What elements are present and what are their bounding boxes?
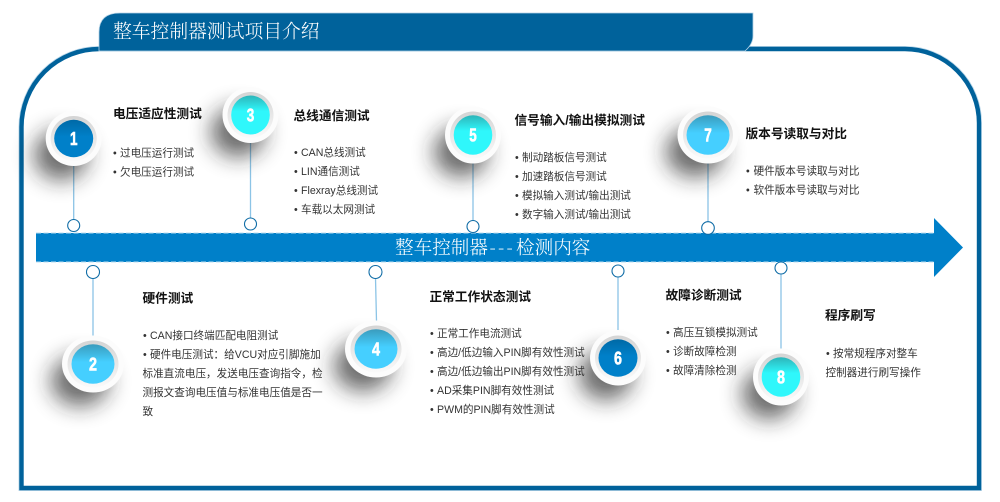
- list 3: •: [294, 147, 298, 159]
- list 6: •: [666, 365, 670, 377]
- list 3: 车载以太网测试: [301, 203, 376, 216]
- panel 8: flashing: [825, 308, 921, 379]
- title tab: [99, 13, 753, 51]
- connector lines: [74, 143, 781, 349]
- list 3: •: [294, 166, 298, 178]
- arrow label: -: [498, 234, 504, 260]
- list 1: •: [113, 166, 117, 178]
- list 3: •: [294, 204, 298, 216]
- list 4: 正常工作电流测试: [437, 327, 522, 340]
- list 5: •: [515, 152, 519, 164]
- panel 1: voltage adaptability: [113, 106, 202, 178]
- list 7: •: [746, 166, 750, 178]
- list 6: •: [666, 327, 670, 339]
- list 6: 故障清除检测: [673, 364, 737, 377]
- list 5: •: [515, 190, 519, 202]
- list 2: 标准直流电压，发送电压查询指令，检: [142, 367, 323, 380]
- panel 2: hardware: [142, 290, 323, 418]
- panel 4: normal working state: [430, 289, 585, 416]
- list 5: •: [515, 171, 519, 183]
- badge 8: [742, 348, 809, 419]
- list 4: 高边/低边输出PIN脚有效性测试: [437, 365, 585, 378]
- list 8: 按常规程序对整车: [833, 347, 918, 360]
- list 5: 模拟输入测试/输出测试: [522, 189, 631, 202]
- arrow label: -: [490, 234, 496, 260]
- badge 7: [666, 106, 738, 177]
- list 7: •: [746, 184, 750, 196]
- list 2: •: [143, 330, 147, 342]
- list 4: •: [430, 328, 434, 340]
- badge 2: [51, 336, 124, 406]
- badge 5: [434, 106, 501, 177]
- badge 3: 3: [247, 104, 254, 126]
- badge 7: 7: [704, 124, 712, 146]
- arrow label: 检测内容: [516, 234, 590, 260]
- badge 6: 6: [614, 348, 622, 368]
- list 2: CAN接口终端匹配电阻测试: [150, 329, 279, 342]
- list 3: Flexray总线测试: [301, 184, 379, 197]
- list 4: •: [430, 347, 434, 359]
- badge 6: [579, 330, 646, 400]
- list 8: 控制器进行刷写操作: [826, 366, 921, 379]
- list 5: 加速踏板信号测试: [522, 170, 607, 183]
- list 2: 硬件电压测试：给VCU对应引脚施加: [150, 348, 321, 361]
- list 1: 欠电压运行测试: [120, 166, 195, 178]
- list 1: •: [113, 148, 117, 160]
- list 4: 高边/低边输入PIN脚有效性测试: [437, 346, 585, 359]
- list 3: •: [294, 185, 298, 197]
- list 6: 诊断故障检测: [673, 345, 737, 358]
- timeline arrow: [36, 218, 963, 277]
- heading 7: 版本号读取与对比: [746, 126, 847, 141]
- list 5: •: [515, 209, 519, 221]
- heading 5: 信号输入/输出模拟测试: [514, 112, 645, 128]
- panel 6: fault diagnosis: [666, 288, 758, 377]
- arrow label: 整车控制器: [395, 234, 488, 260]
- badge 8: 8: [777, 366, 785, 388]
- list 5: 制动踏板信号测试: [522, 151, 607, 164]
- list 7: 硬件版本号读取与对比: [754, 164, 859, 178]
- heading 4: 正常工作状态测试: [430, 289, 531, 304]
- list 2: 致: [142, 405, 154, 418]
- badge 4: 4: [372, 338, 381, 360]
- badge 4: [334, 320, 407, 391]
- list 1: 过电压运行测试: [120, 146, 195, 160]
- list 8: •: [826, 348, 830, 360]
- badge 3: [211, 87, 278, 157]
- list 7: 软件版本号读取与对比: [754, 184, 859, 196]
- list 6: 高压互锁模拟测试: [673, 326, 758, 339]
- node dots: [68, 218, 787, 278]
- heading 2: 硬件测试: [142, 290, 194, 306]
- heading 3: 总线通信测试: [294, 108, 370, 123]
- list 4: AD采集PIN脚有效性测试: [437, 384, 555, 397]
- badge 5: 5: [469, 124, 477, 146]
- badge 1: [34, 111, 102, 180]
- heading 6: 故障诊断测试: [666, 288, 742, 302]
- panel 5: signal io: [514, 112, 645, 221]
- list 3: CAN总线测试: [301, 146, 366, 159]
- list 2: •: [143, 349, 147, 361]
- heading 1: 电压适应性测试: [113, 106, 202, 121]
- list 4: •: [430, 385, 434, 397]
- panel 7: version check: [746, 126, 859, 196]
- list 4: PWM的PIN脚有效性测试: [437, 403, 555, 416]
- title: 整车控制器测试项目介绍: [113, 16, 320, 44]
- list 5: 数字输入测试/输出测试: [522, 208, 631, 221]
- list 4: •: [430, 366, 434, 378]
- list 2: 测报文查询电压值与标准电压值是否一: [142, 386, 323, 399]
- list 6: •: [666, 346, 670, 358]
- heading 8: 程序刷写: [825, 308, 876, 322]
- badge 2: 2: [89, 354, 97, 374]
- list 3: LIN通信测试: [301, 165, 360, 178]
- panel 3: bus communication: [294, 108, 379, 216]
- arrow label: -: [506, 234, 513, 260]
- badge 1: 1: [70, 128, 77, 149]
- list 4: •: [430, 404, 434, 416]
